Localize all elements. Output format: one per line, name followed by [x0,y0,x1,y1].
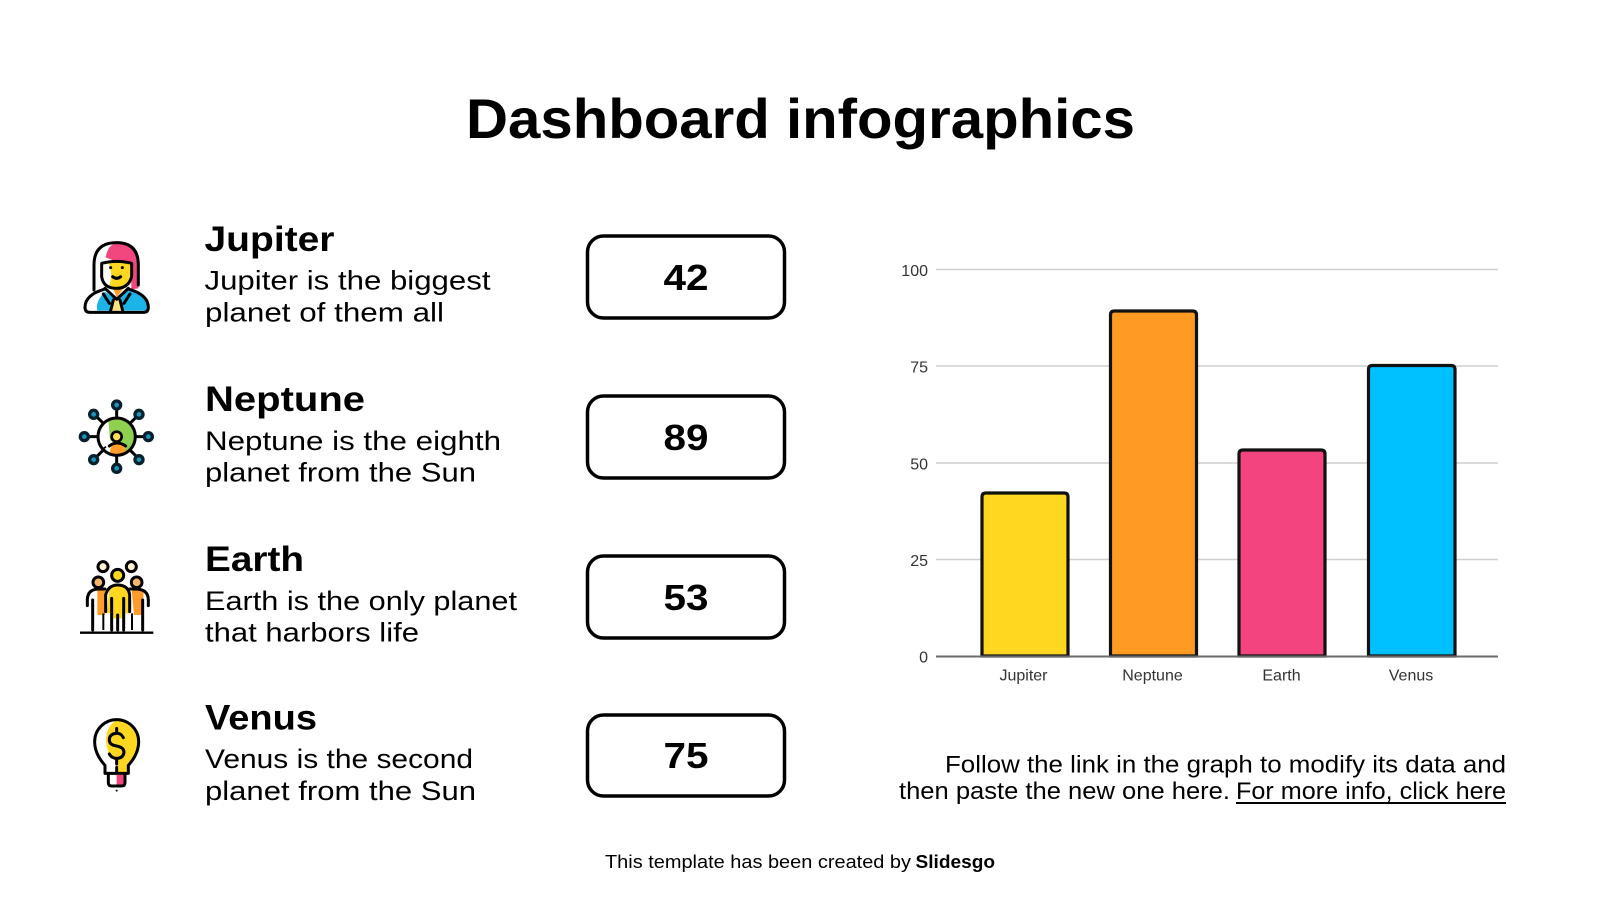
icon: network person [80,401,152,472]
heading: Jupiter: Jupiter [204,220,335,259]
value box: 89 [588,396,784,478]
value box: 42 [588,236,784,318]
bar: Venus 75 [1368,366,1455,656]
description: Neptune: Neptune is the eighth [205,426,501,456]
chart note: Follow the link in the graph to modify its data and [945,752,1506,778]
description: Venus: planet from the Sun [205,776,476,806]
chart note: For more info, click here [1236,778,1506,805]
row: Earth [80,540,785,648]
value box: 75: 75 [664,735,708,776]
y axis labels: 0 [919,650,928,666]
description: Jupiter: planet of them all [205,298,444,328]
description: Earth: that harbors life [205,618,419,648]
x axis labels: Earth [1262,668,1301,684]
description: Earth [205,586,518,648]
icon: light bulb with dollar [95,720,139,792]
description: Neptune: planet from the Sun [205,458,476,488]
description: Jupiter: Jupiter is the biggest [204,266,491,296]
description: Earth: Earth is the only planet [205,586,518,616]
value box: 75 [588,715,784,796]
heading: Neptune: Neptune [205,380,365,419]
x axis labels: Neptune [1122,668,1183,684]
bar: Earth 53 [1239,450,1325,656]
heading: Venus: Venus [205,698,317,738]
y axis labels [901,263,928,666]
x axis labels: Jupiter [999,668,1048,684]
bar: Jupiter 42 [982,493,1068,656]
description: Venus: Venus is the second [205,744,473,774]
description: Neptune [205,426,501,488]
bar chart [901,263,1498,684]
icon: woman avatar [85,243,148,312]
heading: Earth: Earth [205,540,304,579]
y axis labels: 50 [910,456,928,474]
y axis labels: 75 [910,360,928,376]
row: Neptune [80,380,784,488]
y axis labels: 100 [901,263,928,280]
icon: group of people [80,562,153,633]
value box: 53: 53 [664,577,708,618]
footer credit: This template has been created by [605,852,911,872]
chart note: then paste the new one here. [899,778,1230,805]
value box: 53 [588,556,784,638]
y axis labels: 25 [910,553,928,570]
description: Venus [205,744,476,806]
x axis labels [999,668,1433,684]
x axis labels: Venus [1389,668,1433,684]
bar: Neptune 89 [1110,311,1196,656]
footer credit: Slidesgo [916,852,995,872]
description: Jupiter [204,266,491,328]
chart note [899,752,1506,805]
value box: 42: 42 [664,257,708,298]
title: Dashboard infographics [466,87,1135,150]
row: Venus [95,698,784,806]
value box: 89: 89 [664,417,708,458]
row: Jupiter [85,220,784,328]
